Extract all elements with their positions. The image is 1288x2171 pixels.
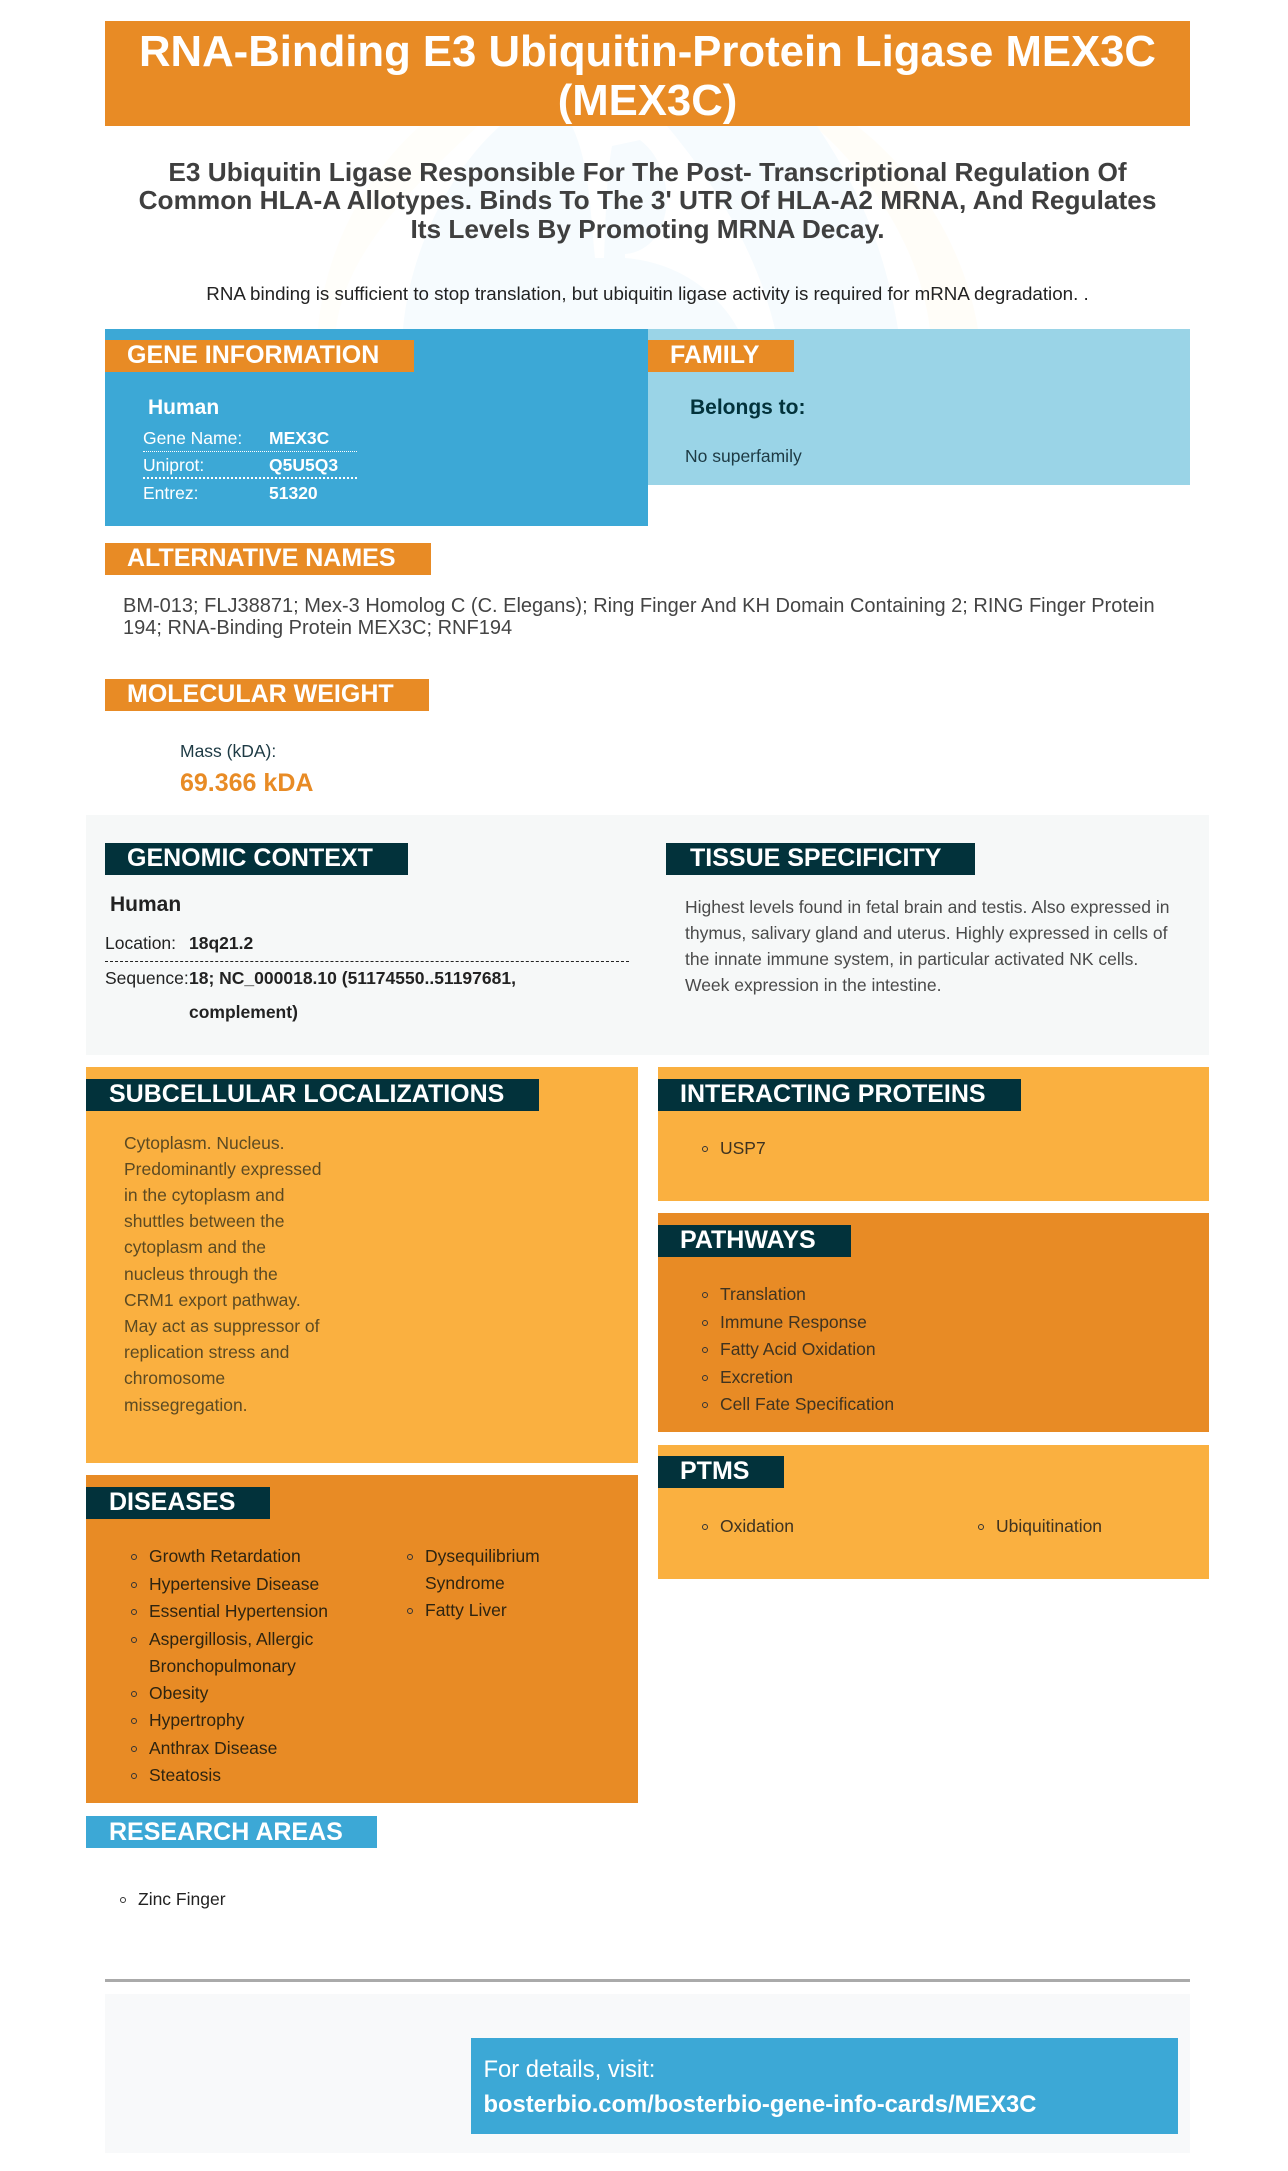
- pathway list: Excretion: [720, 1367, 793, 1387]
- disease list column one: Hypertrophy: [149, 1710, 244, 1730]
- heading: research areas: RESEARCH AREAS: [109, 1818, 343, 1846]
- protein list: USP7: [720, 1138, 766, 1158]
- superfamily text: No superfamily: [685, 446, 802, 466]
- subcellular text: replication stress and: [124, 1342, 289, 1362]
- subcellular text: shuttles between the: [124, 1211, 285, 1231]
- mass value: 69.366 kDA: [180, 768, 313, 796]
- call to action box: [471, 2038, 1178, 2134]
- heading: pathways: [658, 1225, 851, 1256]
- heading: diseases: DISEASES: [109, 1488, 235, 1516]
- subcellular text: cytoplasm and the: [124, 1237, 266, 1257]
- subtitle: Common HLA-A Allotypes. Binds To The 3' UTR Of HLA-A2 MRNA, And Regulates: [139, 185, 1156, 215]
- tissue specificity text: Highest levels found in fetal brain and testis. Also expressed in: [685, 897, 1169, 917]
- subtitle: Its Levels By Promoting MRNA Decay.: [410, 214, 885, 244]
- panel: family: [648, 329, 1190, 485]
- disease list column one: Steatosis: [149, 1765, 221, 1785]
- subtitle: [139, 156, 1156, 244]
- gene table: [143, 428, 357, 502]
- panel: interacting proteins: [658, 1067, 1209, 1201]
- subcellular text: missegregation.: [124, 1395, 248, 1415]
- heading: interacting proteins: INTERACTING PROTEINS: [680, 1080, 986, 1108]
- sequence row: complement): [189, 1002, 298, 1022]
- title: RNA-Binding E3 Ubiquitin-Protein Ligase MEX3C: [139, 27, 1156, 76]
- subcellular text: CRM1 export pathway.: [124, 1290, 301, 1310]
- disease list column one: Anthrax Disease: [149, 1738, 277, 1758]
- alternative names text: 194; RNA-Binding Protein MEX3C; RNF194: [123, 617, 512, 639]
- title: (MEX3C): [558, 76, 737, 125]
- gene table: Q5U5Q3: [269, 454, 338, 474]
- subcellular text: nucleus through the: [124, 1264, 278, 1284]
- PTM list: Ubiquitination: [996, 1516, 1102, 1536]
- pathway list: Cell Fate Specification: [720, 1394, 894, 1414]
- heading: genomic context: GENOMIC CONTEXT: [127, 844, 373, 872]
- divider: [105, 1979, 1190, 1982]
- subtitle: E3 Ubiquitin Ligase Responsible For The Post- Transcriptional Regulation Of: [168, 156, 1127, 186]
- subcellular text: [124, 1132, 321, 1415]
- research list: Zinc Finger: [138, 1889, 226, 1909]
- subcellular text: Predominantly expressed: [124, 1159, 321, 1179]
- gene table: Gene Name:: [143, 428, 242, 448]
- sequence row: Sequence:: [105, 968, 189, 988]
- subcellular text: chromosome: [124, 1368, 225, 1388]
- heading: PTMs: [658, 1456, 784, 1488]
- disease list column two: Syndrome: [425, 1573, 505, 1593]
- heading: diseases: [86, 1487, 270, 1518]
- disease list column one: Growth Retardation: [149, 1546, 301, 1566]
- subcellular text: Cytoplasm. Nucleus.: [124, 1132, 284, 1152]
- tissue specificity text: thymus, salivary gland and uterus. Highly expressed in cells of: [685, 923, 1167, 943]
- details label: For details, visit:: [484, 2056, 655, 2083]
- mass label: Mass (kDA):: [180, 741, 276, 761]
- details link: bosterbio.com/bosterbio-gene-info-cards/MEX3C: [484, 2091, 1036, 2118]
- sequence row: 18; NC_000018.10 (51174550..51197681,: [189, 968, 516, 988]
- panel: genomic context and tissue specificity: [86, 815, 1209, 1055]
- heading: pathways: PATHWAYS: [680, 1226, 816, 1254]
- location row: Location:: [105, 933, 176, 953]
- disease list column one: Essential Hypertension: [149, 1601, 328, 1621]
- disease list column two: [407, 1546, 540, 1620]
- gene table: Uniprot:: [143, 454, 204, 474]
- species label: Human: [148, 396, 219, 419]
- pathway list: Fatty Acid Oxidation: [720, 1339, 876, 1359]
- location row: [105, 931, 629, 962]
- disease list column one: Obesity: [149, 1683, 208, 1703]
- gene table: 51320: [269, 482, 318, 502]
- summary text: RNA binding is sufficient to stop translation, but ubiquitin ligase activity is required for mRNA degradation. .: [206, 283, 1089, 304]
- gene table: Entrez:: [143, 482, 198, 502]
- pathway list: [702, 1284, 894, 1414]
- heading: gene information: GENE INFORMATION: [127, 341, 379, 369]
- heading: tissue specificity: TISSUE SPECIFICITY: [690, 844, 941, 872]
- disease list column one: [131, 1546, 328, 1785]
- disease list column one: Hypertensive Disease: [149, 1574, 319, 1594]
- heading: family: FAMILY: [670, 341, 759, 369]
- tissue specificity text: [685, 897, 1169, 995]
- tissue specificity text: the innate immune system, in particular activated NK cells.: [685, 949, 1138, 969]
- panel: gene information: [105, 329, 648, 526]
- PTM list: [702, 1516, 1102, 1536]
- disease list column two: Fatty Liver: [425, 1600, 507, 1620]
- title: [105, 21, 1190, 126]
- pathway list: Immune Response: [720, 1312, 867, 1332]
- disease list column two: Dysequilibrium: [425, 1546, 540, 1566]
- subcellular text: May act as suppressor of: [124, 1316, 320, 1336]
- PTM list: Oxidation: [720, 1516, 794, 1536]
- panel: pathways: [658, 1213, 1209, 1432]
- panel: subcellular localizations: [86, 1067, 638, 1463]
- sequence row: [105, 968, 516, 1022]
- location row: 18q21.2: [189, 933, 253, 953]
- tissue specificity text: Week expression in the intestine.: [685, 975, 941, 995]
- disease list column one: Aspergillosis, Allergic: [149, 1629, 313, 1649]
- heading: family: [648, 340, 794, 372]
- gene table: MEX3C: [269, 428, 329, 448]
- belongs to label: Belongs to:: [690, 396, 806, 419]
- heading: PTMs: PTMS: [680, 1457, 749, 1485]
- panel: diseases: [86, 1475, 638, 1803]
- heading: molecular weight: MOLECULAR WEIGHT: [127, 680, 394, 708]
- heading: subcellular localizations: SUBCELLULAR LOCALIZATIONS: [109, 1080, 504, 1108]
- disease list column one: Bronchopulmonary: [149, 1656, 296, 1676]
- species label: Human: [110, 893, 181, 916]
- footer panel: [105, 1994, 1190, 2153]
- heading: alternative names: ALTERNATIVE NAMES: [127, 544, 396, 572]
- panel: PTMs: [658, 1445, 1209, 1579]
- pathway list: Translation: [720, 1284, 806, 1304]
- background watermark: [403, 126, 898, 329]
- alternative names text: BM-013; FLJ38871; Mex-3 Homolog C (C. Elegans); Ring Finger And KH Domain Containing 2; RING Finger Protein: [123, 595, 1155, 617]
- alternative names text: [123, 595, 1155, 639]
- subcellular text: in the cytoplasm and: [124, 1185, 285, 1205]
